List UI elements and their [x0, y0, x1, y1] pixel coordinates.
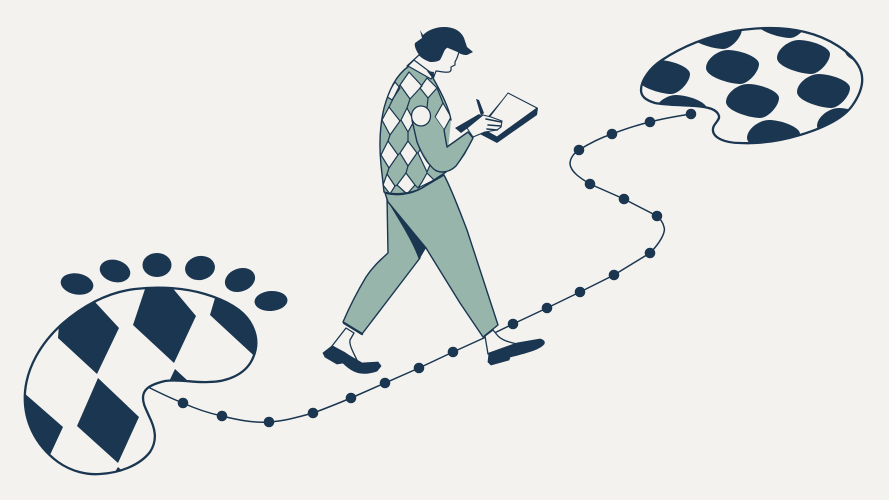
- arm: [412, 110, 473, 172]
- front foot and shoe: [485, 330, 544, 365]
- front trouser leg: [385, 175, 498, 337]
- collar: [408, 60, 434, 79]
- sweater: [380, 66, 451, 194]
- neck and face: [407, 47, 459, 79]
- left footprint sole: [24, 286, 258, 476]
- tablet: [476, 93, 538, 143]
- back trouser leg: [343, 197, 420, 334]
- person walking with tablet: [323, 27, 544, 373]
- stylus: [455, 99, 484, 133]
- hand: [467, 115, 502, 137]
- back foot and shoe: [323, 328, 381, 373]
- right footprint: [640, 26, 864, 144]
- shoulder patch: [412, 106, 430, 126]
- hair: [415, 27, 473, 62]
- dotted path: [148, 109, 696, 427]
- trouser shadow: [388, 202, 426, 260]
- left footprint toes: [59, 253, 288, 312]
